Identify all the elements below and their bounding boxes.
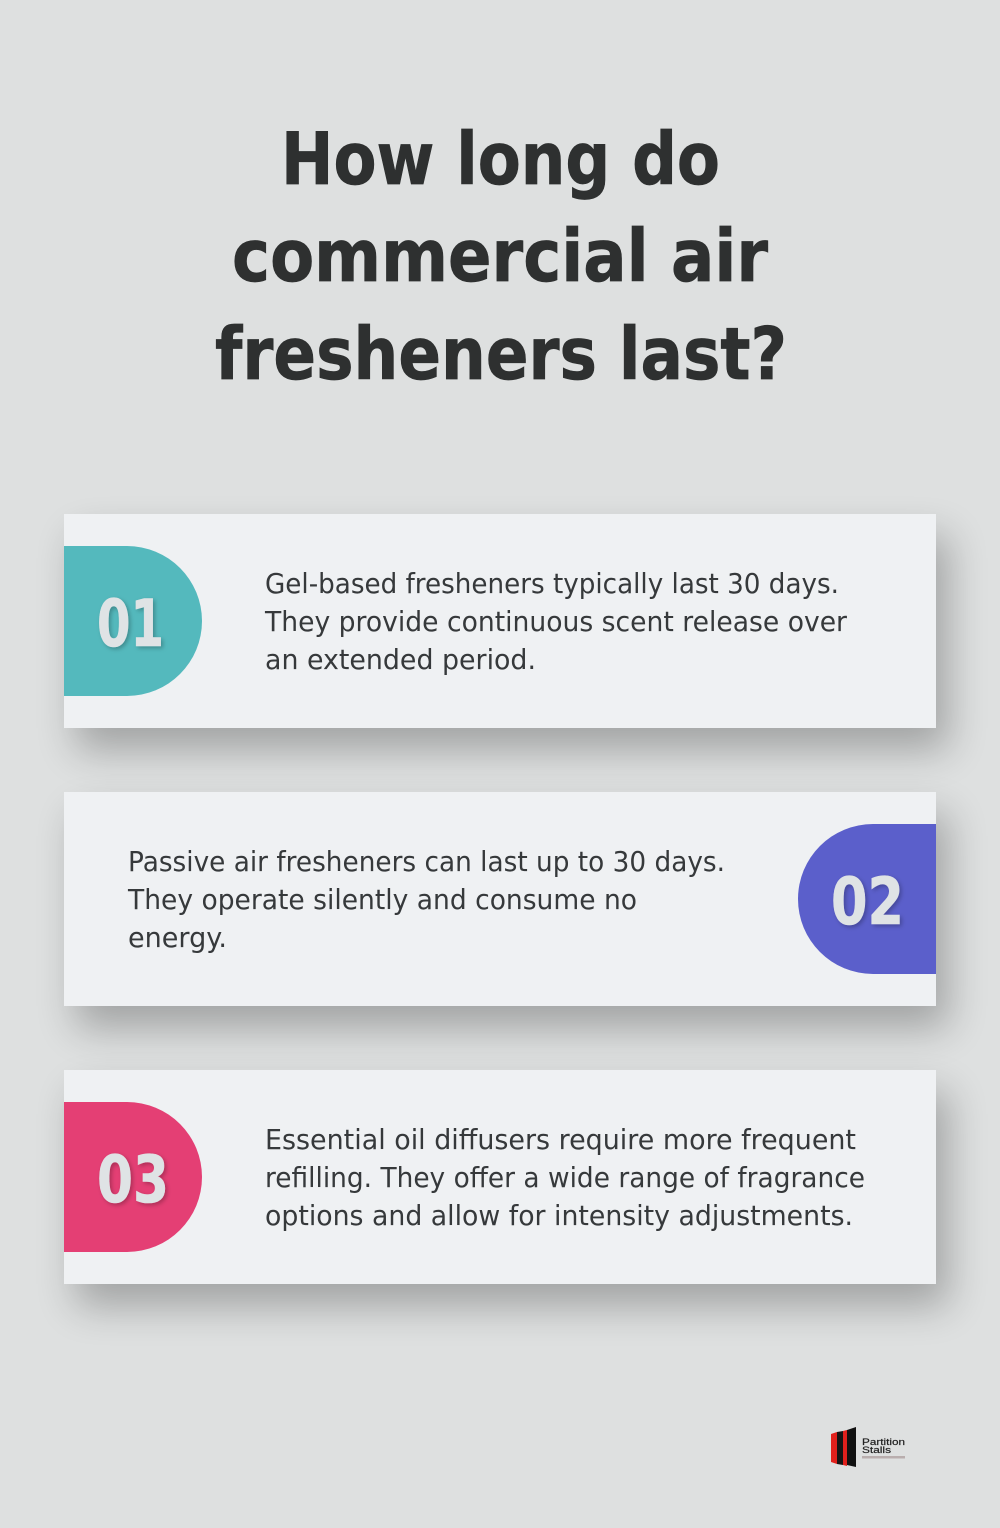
panel: step 01 xyxy=(64,514,948,750)
badge: 03: 03 xyxy=(97,1143,169,1218)
text: gel-based fresheners: an extended period. xyxy=(265,643,536,676)
badge: 01: 01 xyxy=(97,587,164,662)
title: How long do xyxy=(281,117,720,201)
text: passive air fresheners xyxy=(127,845,725,954)
logo: Partition Stalls: Stalls xyxy=(862,1445,891,1456)
text: essential oil diffusers: options and allow for intensity adjustments. xyxy=(265,1199,853,1232)
logo: Partition Stalls: Partition xyxy=(862,1437,905,1448)
title: fresheners last? xyxy=(215,312,787,396)
text: passive air fresheners: energy. xyxy=(128,921,227,954)
text: essential oil diffusers xyxy=(265,1123,865,1232)
text: gel-based fresheners xyxy=(264,567,847,676)
text: essential oil diffusers: refilling. They offer a wide range of fragrance xyxy=(265,1161,865,1194)
badge: 02: 02 xyxy=(831,865,904,940)
badge: 03 xyxy=(64,1102,202,1252)
panel: step 03 xyxy=(64,1070,948,1306)
badge: 01 xyxy=(64,546,202,696)
logo: Partition Stalls xyxy=(831,1427,905,1467)
text: passive air fresheners: Passive air fresheners can last up to 30 days. xyxy=(128,845,725,878)
title xyxy=(215,117,787,396)
panel: step 02 xyxy=(64,792,948,1028)
text: gel-based fresheners: Gel-based fresheners typically last 30 days. xyxy=(265,567,839,600)
text: gel-based fresheners: They provide continuous scent release over xyxy=(264,605,847,638)
icon: partition panels xyxy=(831,1427,856,1467)
text: passive air fresheners: They operate silently and consume no xyxy=(127,883,637,916)
title: commercial air xyxy=(232,214,768,298)
badge: 02 xyxy=(798,824,936,974)
text: essential oil diffusers: Essential oil diffusers require more frequent xyxy=(265,1123,856,1156)
